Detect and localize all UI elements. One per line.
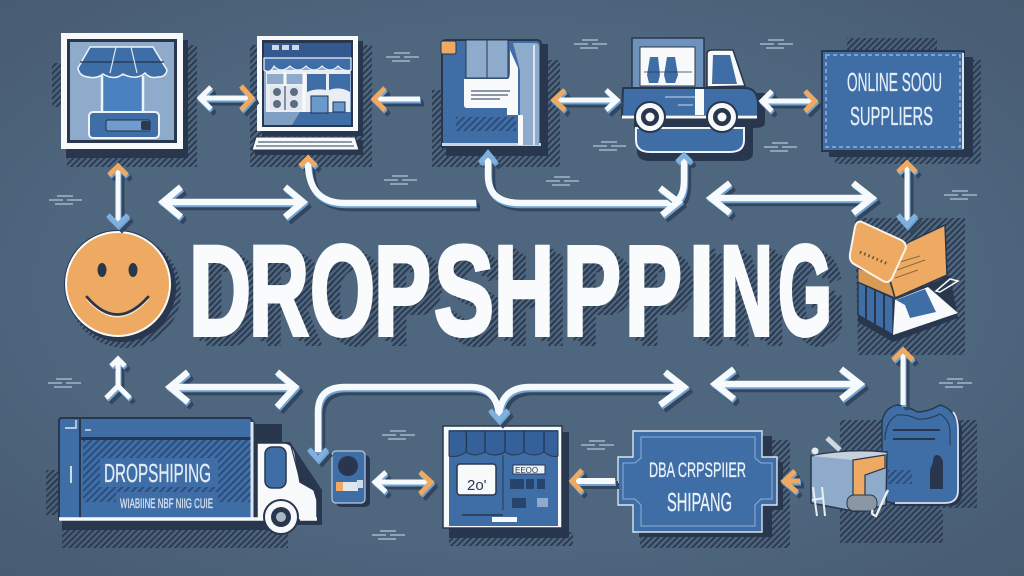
icon: laptop with online shop [250, 36, 372, 167]
arrow: suppliers to box [898, 163, 916, 225]
arrow: truck to suppliers [762, 91, 815, 111]
title: I [702, 229, 727, 372]
title: S [447, 229, 507, 372]
title: P [625, 220, 682, 363]
arrow: top double right [711, 183, 872, 213]
title: I [689, 220, 714, 363]
label: online suppliers text [847, 67, 942, 131]
label: online suppliers text: SUPPLIERS [850, 101, 933, 131]
icon: supply box with tools [811, 438, 888, 516]
title: N [726, 224, 779, 367]
title: O [316, 224, 381, 367]
title: G [778, 220, 832, 363]
title: G [791, 229, 845, 372]
icon: pickup truck [622, 38, 765, 161]
icon: open box [850, 218, 965, 355]
title: P [563, 220, 621, 363]
panel: online suppliers sign [822, 38, 981, 164]
label: truck text [104, 458, 213, 511]
arrow: package to laptop [374, 88, 420, 110]
arrow: smiley to truck [106, 359, 130, 398]
title: G [784, 224, 838, 367]
label: plaque text [649, 459, 746, 517]
label: online suppliers text: ONLINE SOOU [847, 67, 942, 97]
label: small window glyphs: 2o' [467, 477, 487, 494]
title: P [631, 224, 688, 367]
arrow: curve from package to truck [480, 153, 672, 203]
arrow: plaque to bottom store [572, 470, 615, 492]
arrow: bottom branched curve [309, 372, 684, 459]
title: O [323, 229, 388, 372]
label: plaque text: DBA CRPSPIIER [649, 459, 746, 482]
title: P [387, 229, 444, 372]
arrow: package to truck [554, 90, 617, 110]
title: R [255, 224, 315, 367]
icon: bottom storefront: EEOO [515, 466, 538, 475]
title: P [576, 229, 634, 372]
title: P [569, 224, 627, 367]
label: truck text: DROPSHIPING [104, 458, 211, 488]
label: truck text: WIABIINE NBF NIIG CUIE [120, 495, 213, 511]
label: plaque text: SHIPANG [667, 487, 732, 517]
title: O [310, 220, 375, 363]
icon: smiley face [64, 230, 181, 348]
icon: delivery truck [46, 418, 322, 548]
arrow: smiley to store [108, 166, 128, 225]
title: D [195, 224, 257, 367]
icon: storefront frame [52, 33, 197, 167]
title: I [695, 224, 720, 367]
title [189, 220, 845, 372]
title: P [638, 229, 695, 372]
icon: backpack [840, 405, 977, 543]
title: D [189, 220, 251, 363]
icon: bottom storefront [443, 426, 573, 546]
arrow: top double left [163, 187, 303, 217]
title: H [500, 224, 560, 367]
title: R [262, 229, 322, 372]
title: R [249, 220, 309, 363]
icon: package document [432, 40, 560, 167]
title: S [440, 224, 500, 367]
arrow: box to plaque [784, 471, 800, 492]
arrow: bottom double right [715, 369, 860, 399]
title: P [380, 224, 437, 367]
arrow: truck junction [660, 155, 691, 215]
arrow: backpack to open box [893, 350, 913, 405]
title: H [507, 229, 567, 372]
title: P [374, 220, 431, 363]
title: N [733, 229, 786, 372]
title: N [720, 220, 773, 363]
title: H [494, 220, 554, 363]
arrow: curve to laptop [300, 158, 476, 203]
title: S [434, 220, 494, 363]
arrow: bottom double left [170, 372, 295, 407]
icon: smartphone card [332, 451, 370, 507]
panel: dropshipper shipping plaque [618, 431, 790, 548]
title: D [202, 229, 264, 372]
arrow: store to laptop [200, 86, 252, 110]
arrow: phone to bottom store [375, 472, 431, 494]
